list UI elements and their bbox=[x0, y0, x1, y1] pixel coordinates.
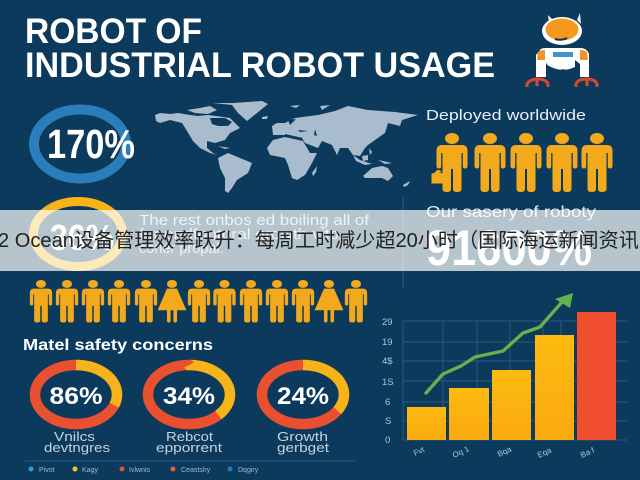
donut labels: devtngres bbox=[44, 440, 111, 455]
bar chart: Ba f bbox=[579, 445, 596, 460]
donut labels: epporrent bbox=[156, 440, 222, 455]
banner overlay bbox=[0, 210, 640, 271]
title: ROBOT OF bbox=[25, 12, 202, 51]
legend: Kagy bbox=[82, 467, 98, 474]
bar chart: Oq 1 bbox=[451, 444, 471, 460]
ring: 36%: 36% bbox=[50, 217, 114, 258]
bar chart: 1S bbox=[382, 377, 394, 388]
bar chart: Fvt bbox=[412, 445, 427, 458]
people row: deployed bbox=[432, 133, 612, 192]
donut: 34% bbox=[148, 365, 230, 424]
text block: description: coner propal. bbox=[139, 241, 224, 257]
bar chart bbox=[382, 293, 627, 460]
bar chart: S bbox=[385, 416, 391, 427]
divider bbox=[402, 198, 404, 288]
ring: 170% bbox=[34, 110, 135, 178]
ring: 170%: 170% bbox=[47, 121, 135, 167]
legend: Ceastslry bbox=[181, 467, 211, 474]
bar chart: Bqa bbox=[496, 444, 513, 459]
donut: 86% bbox=[35, 365, 117, 424]
heading: safety concerns: Matel safety concerns bbox=[23, 337, 213, 354]
donut: 24%: 24% bbox=[277, 383, 329, 410]
text block: description: for ondfontoral growth vito bbox=[139, 227, 339, 243]
donut labels: Rebcot bbox=[166, 429, 213, 444]
bar chart: Eqa bbox=[536, 445, 553, 460]
donut labels: Growth bbox=[277, 429, 328, 444]
stat: our sasery of roboty: 91600% bbox=[426, 220, 592, 276]
heading: deployed worldwide: Deployed worldwide bbox=[426, 107, 586, 124]
bar chart: 4$ bbox=[382, 356, 393, 367]
ring: 36% bbox=[34, 202, 122, 266]
donut: 34%: 34% bbox=[163, 383, 215, 410]
stat: our sasery of roboty: Our sasery of roboty bbox=[426, 204, 596, 221]
legend: Pivot bbox=[39, 467, 55, 474]
text block: description: The rest onbos ed boiling all of bbox=[139, 213, 370, 229]
donut labels bbox=[44, 429, 329, 455]
legend bbox=[25, 461, 355, 474]
donut labels: Vnilcs bbox=[54, 429, 96, 444]
bar chart: 6 bbox=[385, 397, 390, 408]
donut: 86%: 86% bbox=[50, 383, 102, 410]
icon: robot mascot bbox=[527, 13, 597, 87]
title bbox=[25, 12, 495, 85]
bar chart: 29 bbox=[382, 317, 393, 328]
text block: description bbox=[139, 213, 370, 257]
title: INDUSTRIAL ROBOT USAGE bbox=[25, 46, 495, 85]
trend arrow bbox=[426, 293, 573, 393]
bar chart: 0 bbox=[385, 435, 390, 446]
people row: workforce bbox=[30, 280, 367, 322]
legend: Dqgiry bbox=[238, 467, 259, 474]
donut labels: gerbget bbox=[277, 440, 329, 455]
banner overlay: 2 Ocean设备管理效率跃升：每周工时减少超20小时（国际海运新闻资讯 bbox=[0, 229, 639, 252]
bar chart: 19 bbox=[382, 337, 393, 348]
map: inland seas bbox=[210, 118, 317, 138]
donut: 24% bbox=[262, 365, 344, 424]
world map bbox=[155, 101, 418, 193]
legend: Ivlwnis bbox=[129, 467, 151, 474]
